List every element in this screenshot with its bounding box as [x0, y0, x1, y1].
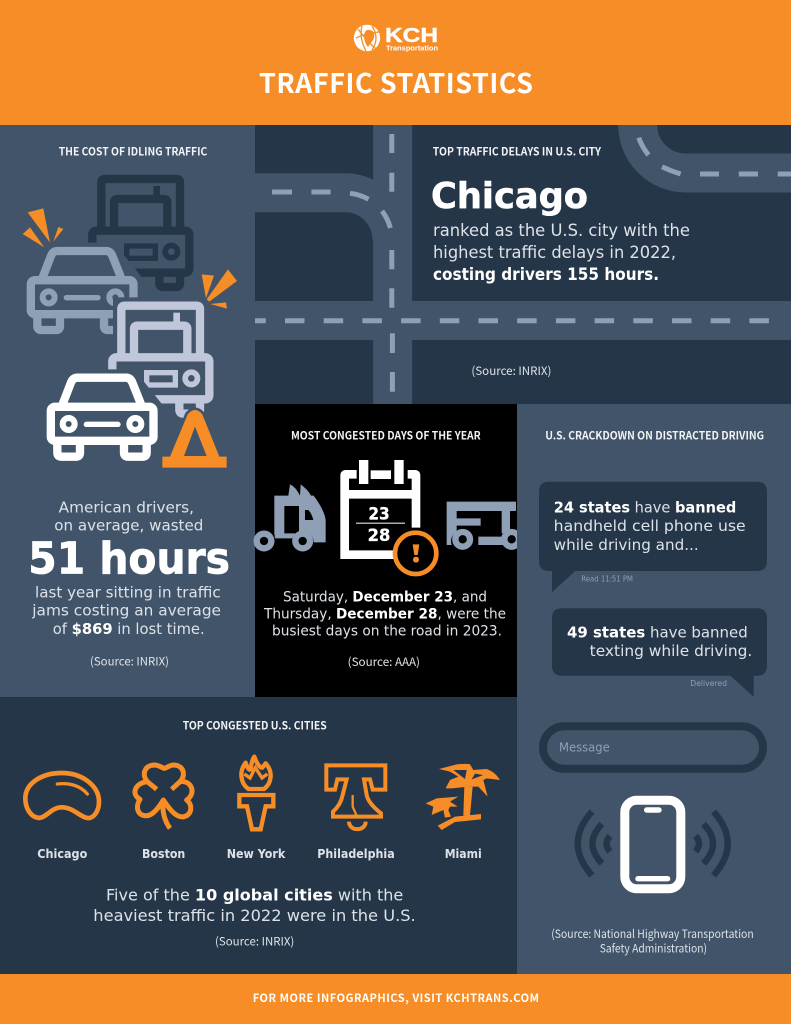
chat bubble: 49 states: texting while driving.: [590, 642, 752, 660]
source: (Source: AAA): [348, 654, 420, 670]
title: TRAFFIC STATISTICS: [259, 62, 533, 101]
logo: KCH Transportation: [354, 24, 438, 52]
header band: [0, 0, 791, 125]
heading: cost of idling: THE COST OF IDLING TRAFFIC: [59, 144, 207, 160]
heading: top traffic delays: TOP TRAFFIC DELAYS IN U.S. CITY: [433, 144, 602, 160]
chat bubble: 24 states: 24 states have banned: [554, 498, 736, 516]
footer band: FOR MORE INFOGRAPHICS, VISIT KCHTRANS.COM: [253, 990, 539, 1006]
stat text: Chicago: ranked as the U.S. city with the: [433, 221, 690, 241]
city labels: Miami: [445, 847, 482, 861]
stat text: Chicago: highest traffic delays in 2022,: [433, 243, 676, 263]
footer band: [0, 974, 791, 1024]
panel: distracted driving: [517, 404, 791, 974]
city labels: Chicago: [37, 847, 87, 861]
city labels: New York: [227, 847, 286, 861]
logo: KCH Transportation: KCH: [385, 24, 438, 47]
panel: top traffic delays: [255, 125, 791, 404]
body text: congested days: Thursday, December 28, were the: [263, 607, 506, 623]
stat text: Chicago: [431, 176, 690, 285]
icon: calendar with vehicles: 23: [368, 504, 390, 523]
icon: vibrating phone: [578, 800, 728, 889]
chat bubble: 24 states: [539, 482, 767, 592]
heading: top congested cities: TOP CONGESTED U.S. CITIES: [183, 718, 327, 734]
body text: congested days: [263, 590, 506, 640]
chat bubble: 24 states: handheld cell phone use: [554, 517, 746, 535]
stat text: Chicago: costing drivers 155 hours.: [433, 265, 659, 285]
city labels: [37, 847, 482, 861]
road map: [255, 125, 791, 404]
icon: Philadelphia liberty bell: [326, 765, 385, 829]
body text: congested days: Saturday, December 23, and: [283, 590, 487, 606]
chat bubble: 49 states: 49 states have banned: [567, 623, 748, 641]
source: [551, 926, 754, 956]
icon: Boston shamrock: [135, 765, 192, 828]
stat text: 51 hours: (Source: INRIX): [90, 653, 169, 669]
stat text: 51 hours: of $869 in lost time.: [53, 620, 205, 638]
chat bubble: 49 states: [552, 608, 767, 697]
body text: congested days: busiest days on the road in 2023.: [272, 624, 502, 640]
heading: congested days: MOST CONGESTED DAYS OF THE YEAR: [291, 427, 481, 443]
logo: KCH Transportation: Transportation: [386, 46, 438, 52]
stat text: 51 hours: jams costing an average: [31, 602, 221, 620]
stat text: Chicago: Chicago: [431, 176, 588, 217]
source: Safety Administration): [600, 940, 707, 956]
panel: top congested cities: [0, 697, 517, 974]
stat text: 51 hours: on average, wasted: [54, 517, 203, 535]
icon: traffic jam vehicles: [23, 179, 237, 468]
source: (Source: National Highway Transportation: [551, 926, 754, 942]
stat text: 51 hours: [28, 499, 230, 669]
message input field: [543, 726, 763, 769]
icon: calendar with vehicles: [257, 460, 519, 574]
icon: Chicago bean: [25, 773, 99, 818]
chat bubble: 24 states: while driving and...: [554, 536, 699, 554]
icon: New York torch: [239, 757, 273, 829]
city labels: Boston: [142, 847, 185, 861]
chat bubble: 49 states: Delivered: [690, 679, 727, 688]
chat bubble: 24 states: Read 11:51 PM: [581, 574, 633, 583]
icon: Miami palm trees: [426, 764, 500, 830]
stat text: 51 hours: American drivers,: [59, 499, 194, 517]
source: (Source: INRIX): [471, 363, 551, 379]
body text: global cities: Five of the 10 global cities with the: [106, 886, 403, 905]
icon: calendar with vehicles: 28: [368, 526, 390, 545]
source: (Source: INRIX): [215, 934, 294, 950]
stat text: 51 hours: 51 hours: [28, 533, 230, 584]
body text: global cities: [93, 886, 416, 925]
panel: most congested days: [255, 404, 519, 697]
stat text: 51 hours: last year sitting in traffic: [35, 583, 221, 601]
body text: global cities: heaviest traffic in 2022 were in the U.S.: [93, 906, 416, 925]
city labels: Philadelphia: [317, 847, 395, 861]
heading: distracted driving: U.S. CRACKDOWN ON DISTRACTED DRIVING: [545, 427, 764, 443]
message input field: Message: [559, 741, 610, 755]
panel: the cost of idling traffic: [0, 125, 255, 697]
